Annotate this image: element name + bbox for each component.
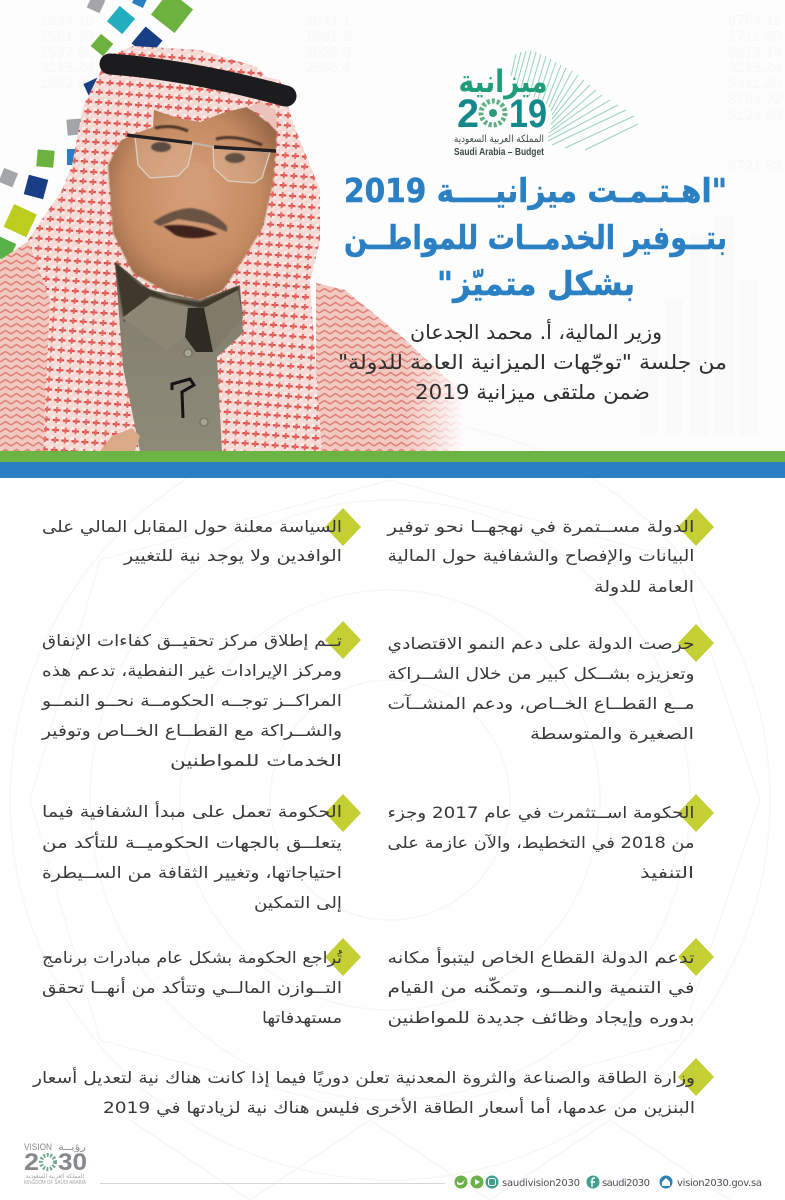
- logo: vision 2030: KINGDOM OF SAUDI ARABIA: [24, 1180, 87, 1186]
- bullet: energy prices: البنزين من عدمها، أما أسعار الطاقة الأخرى فليس هناك نية لزيادتها في 2019: [103, 1097, 695, 1118]
- bullet: transparency: [42, 794, 361, 913]
- forehead scarf: [100, 50, 300, 150]
- logo: vision 2030: المملكة العربية السعودية: [26, 1173, 84, 1180]
- bullet: economic growth: الصغيرة والمتوسطة: [530, 724, 694, 744]
- subtitle: [338, 319, 727, 404]
- title: "اهـتـمـت ميزانيــــة 2019: [344, 171, 727, 211]
- bullet: fiscal balance programme: [42, 938, 361, 1028]
- text: 6213.14: [728, 44, 782, 61]
- bullet: state continues: [386, 508, 714, 597]
- logo: vision 2030: 30: [58, 1149, 87, 1176]
- shirt collar right: [204, 290, 243, 352]
- left shoulder scarf: [0, 240, 55, 451]
- dark neck shadows: [115, 262, 243, 322]
- text: 1233.15: [40, 12, 94, 29]
- logo: vision 2030: رؤيــة: [58, 1143, 86, 1153]
- bullet: state continues: العامة للدولة: [594, 577, 694, 597]
- nose: [182, 160, 213, 203]
- head scarf: [28, 46, 322, 451]
- logo: vision 2030: VISION: [24, 1142, 52, 1152]
- bullet: economic growth: [388, 624, 714, 744]
- header divider bands: [0, 451, 785, 478]
- agal: [110, 64, 286, 96]
- text: 2041.1: [305, 12, 351, 29]
- bullet: private sector: تدعم الدولة القطاع الخاص ليتبوأ مكانه: [388, 947, 694, 968]
- eyebrows: [155, 127, 262, 145]
- hand: [100, 428, 140, 451]
- icon: youtube: [470, 1176, 484, 1188]
- subtitle: من جلسة "توجّهات الميزانية العامة للدولة": [338, 350, 727, 374]
- text: 1552.82: [40, 75, 94, 92]
- title: [344, 171, 727, 304]
- text: 2555.4: [305, 59, 351, 76]
- icon: website: [660, 1176, 672, 1188]
- bullet: economic growth: حرصت الدولة على دعم النمو الاقتصادي: [388, 634, 694, 654]
- bullet: spending efficiency centre: تــم إطلاق مركز تحقيــق كفاءات الإنفاق: [42, 631, 342, 651]
- microphone: [172, 379, 194, 418]
- text: 8754.12: [728, 12, 782, 29]
- buttons: [184, 349, 208, 426]
- scarf inner fold: [247, 102, 277, 132]
- logo year right: 19: [509, 92, 547, 136]
- bullet: policy on expatriates: [42, 508, 361, 566]
- bullet: transparency: الحكومة تعمل على مبدأ الشفافية فيما: [42, 801, 342, 822]
- handle: saudi2030: saudi2030: [602, 1178, 650, 1189]
- text: 1561.25: [40, 28, 94, 45]
- text: 5124.63: [728, 107, 782, 124]
- bullet: private sector: في التنمية والنمــو، وتمكّنه من القيام: [388, 975, 694, 998]
- title: بشكل متميّز": [437, 264, 635, 304]
- bullet: policy on expatriates: السياسة معلنة حول المقابل المالي على: [42, 517, 342, 537]
- shirt collar left: [122, 297, 190, 350]
- bullet: energy prices: وزارة الطاقة والصناعة والثروة المعدنية تعلن دوريًا فيما إذا كانت هناك نية لتعديل أسعار: [32, 1067, 695, 1088]
- moustache: [153, 208, 227, 232]
- bullet: spending efficiency centre: الخدمات للمواطنين: [170, 751, 342, 771]
- bullet: spending efficiency centre: ومركز الإيرادات غير النفطية، تدعم هذه: [42, 661, 342, 681]
- logo emblem: [481, 101, 505, 125]
- bullet: spending efficiency centre: [41, 621, 361, 771]
- icon: facebook: [586, 1176, 600, 1188]
- bullet: fiscal balance programme: مستهدفاتها: [262, 1008, 342, 1028]
- text: 8794.22: [728, 91, 782, 108]
- bullet: transparency: احتياجاتها، وتغيير الثقافة من الســيطرة: [42, 863, 342, 883]
- bullet: private sector: [388, 938, 714, 1028]
- logo arabic caption: المملكة العربية السعودية: [454, 134, 544, 145]
- icon: twitter: [454, 1176, 468, 1188]
- logo year left: 2: [457, 92, 479, 136]
- bullet: transparency: إلى التمكين: [254, 893, 342, 913]
- bullet: energy prices: [32, 1058, 714, 1118]
- handle: vision2030.gov.sa: vision2030.gov.sa: [677, 1178, 762, 1189]
- handle: saudivision2030: saudivision2030: [502, 1178, 580, 1189]
- logo: vision 2030: 2: [24, 1149, 39, 1176]
- bullet: fiscal balance programme: تُراجع الحكومة بشكل عام مبادرات برنامج: [42, 948, 343, 968]
- footer social links: [454, 1176, 762, 1189]
- bullet: spending efficiency centre: والشــراكة مع القطــاع الخــاص وتوفير: [41, 721, 342, 741]
- saudi map lines: [511, 51, 638, 150]
- logo: budget 2019: [454, 51, 638, 158]
- logo english caption: Saudi Arabia – Budget: [454, 147, 545, 158]
- glasses browline: [127, 135, 276, 151]
- bullet: fiscal balance programme: التــوازن المالــي وتتأكد من أنهــا تحقق: [42, 976, 342, 998]
- decorative coloured squares: [0, 0, 193, 262]
- bullet: policy on expatriates: الوافدين ولا يوجد نية للتغيير: [123, 546, 342, 566]
- bullet: economic growth: مــع القطــاع الخــاص، ودعم المنشــآت: [388, 694, 694, 714]
- bullet: state continues: البيانات والإفصاح والشفافية حول المالية: [388, 546, 694, 566]
- text: 5411.20: [728, 75, 781, 92]
- thobe: [115, 262, 243, 451]
- bullet: private sector: بدوره وإيجاد وظائف جديدة للمواطنين: [388, 1008, 694, 1028]
- text: 1711.25: [728, 28, 781, 45]
- logo word: ميزانية: [458, 64, 548, 100]
- bullet: economic growth: وتعزيزه بشــكل كبير من خلال الشــراكة: [388, 664, 694, 684]
- bullet: government invested: [388, 794, 714, 882]
- bullet: state continues: الدولة مســتمرة في نهجهــا نحو توفير: [386, 517, 694, 537]
- face: [108, 106, 277, 300]
- logo: vision 2030: [24, 1142, 87, 1186]
- glasses: [135, 136, 270, 183]
- bullet: government invested: من 2018 في التخطيط، والآن عازمة على: [388, 833, 694, 853]
- bullet: spending efficiency centre: المراكــز توجــه الحكومــة نحــو النمــو: [41, 691, 342, 711]
- text: 3215.24: [40, 59, 94, 76]
- bullet: government invested: الحكومة اســتثمرت في عام 2017 وجزء: [388, 803, 694, 823]
- text: 2022.5: [305, 44, 351, 61]
- subtitle: وزير المالية، أ. محمد الجدعان: [410, 319, 662, 344]
- right shoulder scarf: [316, 283, 465, 451]
- text: 9721.88: [728, 157, 782, 174]
- icon: instagram: [486, 1176, 498, 1188]
- bullet: government invested: التنفيذ: [640, 863, 694, 882]
- subtitle: ضمن ملتقى ميزانية 2019: [415, 380, 650, 404]
- photo: finance minister: [0, 46, 465, 451]
- collar gap: [185, 308, 213, 352]
- mouth: [163, 225, 218, 238]
- eyes: [151, 142, 245, 163]
- text: 1581.2: [305, 28, 351, 45]
- text: 3215.24: [728, 59, 782, 76]
- bullet: transparency: يتعلــق بالجهات الحكوميــة للتأكد من: [42, 831, 342, 853]
- text: 1527.52: [40, 44, 94, 61]
